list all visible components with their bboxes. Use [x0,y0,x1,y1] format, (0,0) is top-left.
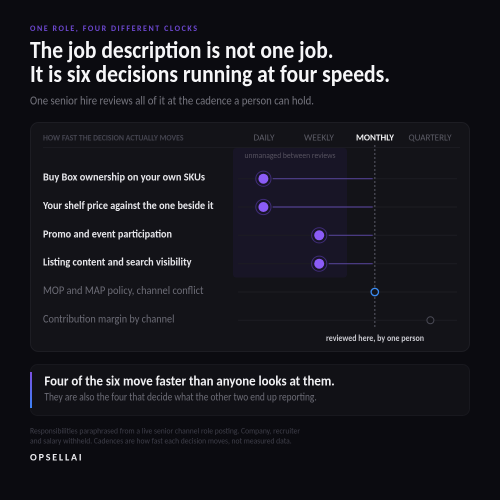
brand wordmark: OPSELLAI [30,450,82,464]
callout heading: Four of the six move faster than anyone looks at them. [44,372,335,390]
monthly dot [371,288,378,296]
title [30,36,390,89]
unmanaged band [233,148,347,278]
column headers: QUARTERLY [408,132,452,144]
title: The job description is not one job. [30,36,334,65]
row labels: Promo and event participation [43,227,172,240]
review annotation: reviewed here, by one person [326,333,424,344]
footnote [30,426,300,446]
fast decision dots [256,171,327,271]
footnote: Responsibilities paraphrased from a live senior channel role posting. Company, recruiter [30,426,300,436]
gap lines [273,179,373,264]
row labels: Buy Box ownership on your own SKUs [43,171,206,184]
monthly review line [374,145,376,327]
callout accent bar [30,372,32,408]
row labels: Contribution margin by channel [43,312,174,325]
unmanaged band: unmanaged between reviews [244,151,336,161]
quarterly dot [427,317,434,324]
column headers: MONTHLY [356,132,394,144]
callout body: They are also the four that decide what the other two end up reporting. [44,390,317,404]
title: It is six decisions running at four speeds. [30,60,390,89]
row labels [42,171,214,325]
panel: cadence chart [30,122,470,352]
chart heading: HOW FAST THE DECISION ACTUALLY MOVES [43,134,184,144]
subtitle: One senior hire reviews all of it at the cadence a person can hold. [30,94,314,108]
column headers [254,132,452,144]
row labels: Your shelf price against the one beside it [42,199,214,212]
footnote: and salary withheld. Cadences are how fast each decision moves, not measured data. [30,436,292,446]
callout [30,364,470,416]
row labels: Listing content and search visibility [43,256,192,268]
column headers: WEEKLY [304,132,335,144]
eyebrow label: ONE ROLE, FOUR DIFFERENT CLOCKS [30,24,197,34]
row labels: MOP and MAP policy, channel conflict [43,284,204,297]
column headers: DAILY [254,132,275,144]
